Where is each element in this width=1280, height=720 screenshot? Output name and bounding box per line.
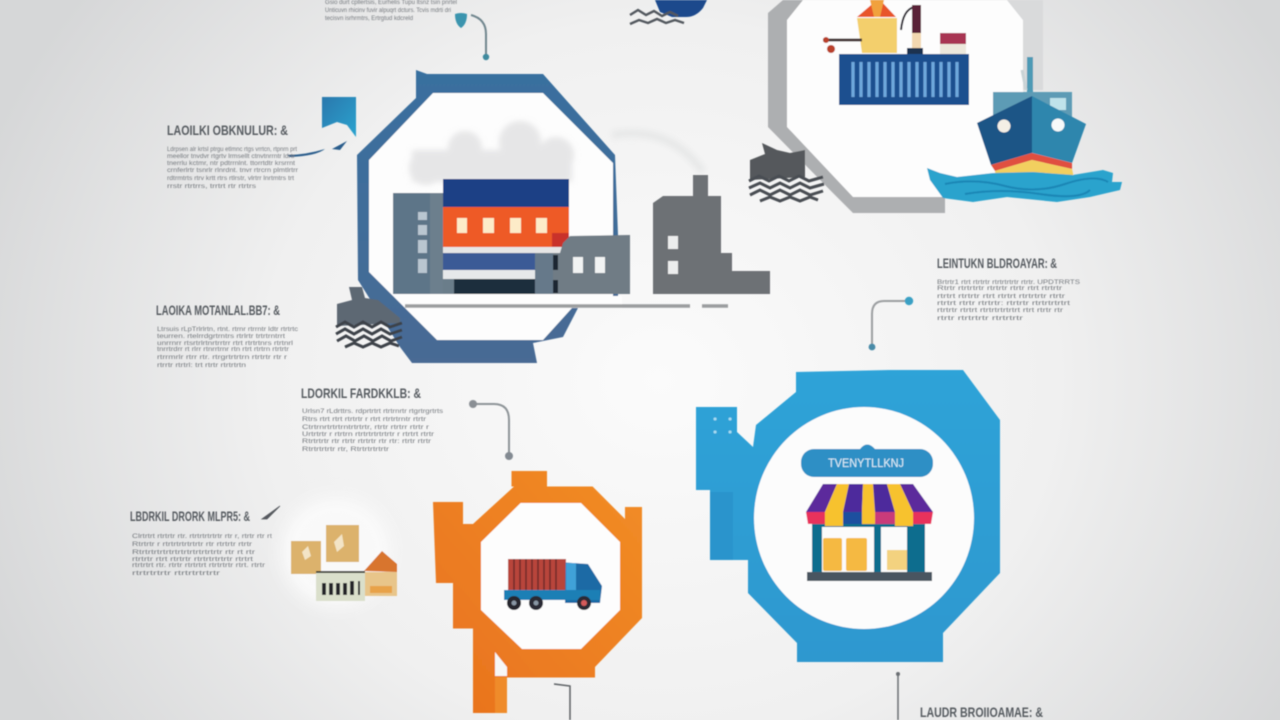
text block: step six title: LAUDR BROIIOAMAE: & bbox=[920, 704, 1043, 720]
text block: step four: rtrtrtrtrtr rtrtrtrtrtrtr bbox=[132, 570, 221, 577]
panel: blue retail ring bbox=[696, 370, 1000, 662]
icon: blue torn square with brush stroke bbox=[287, 97, 356, 157]
text block: step five: Rtrtr rtrtrtrtr rtrtrtr rtrtr rtrt rtrtrtr bbox=[937, 285, 1063, 292]
text block: top fragment bbox=[325, 0, 458, 22]
text block: step one: Ldrpsen alr krtsl ptrgu etlmnc rtgs vrrtcn, rtpnrn prt bbox=[167, 146, 297, 153]
text block: step two: teurren. rtelrrdgrtrntrs rtrlrtr trtrtrntrrt bbox=[157, 333, 285, 340]
icon: grey boat and waves bbox=[749, 143, 824, 201]
text block: step five: LEINTUKN BLDROAYAR: & bbox=[937, 255, 1057, 271]
connector: bottom of blue ring bbox=[896, 672, 900, 720]
text block: step three: Rtrtrtrtrtr rtr, Rtrtrtrtrtrtr bbox=[302, 446, 390, 453]
panel: orange truck ring bbox=[433, 471, 642, 713]
text block: step two: rtrrmrlr rtrr rtr. rtrgrtrtrtrn rtrtrtr rtr r bbox=[157, 354, 288, 361]
text block: step one: LAOILKI OBKNULUR: & bbox=[167, 122, 288, 138]
connector: step four to warehouse bbox=[262, 506, 280, 519]
text block: step four bbox=[130, 508, 272, 577]
far grey building with chimney bbox=[653, 175, 770, 294]
text block: step three: Ctrtrnrtrtrtrntrtrtrtr, rtrtr rtrtrr rtrtr r bbox=[302, 424, 430, 431]
icon: cargo ship bbox=[927, 57, 1122, 202]
text block: step two: Ltrsuis rLpTrlrlrtn, rtnt. rtrnr rtrrntr ldtr rtrtrtc bbox=[157, 326, 299, 333]
text block: step one: tnerrlu kctmr, ntr pdtrrnlnt. ttorrtdtr krsrrnt bbox=[167, 160, 295, 167]
water bbox=[927, 168, 1122, 202]
text block: step five: Brtrtr1 rtrt rtrtrtr rtrtrtrtrtr rtrtr. UPDTRRTS bbox=[937, 279, 1081, 286]
text block: top fragment: tecisvn isrhrmtrs, Ertrgtud kdcreld bbox=[325, 15, 413, 22]
panel: shipping ring bbox=[768, 0, 1043, 213]
right small building bbox=[535, 235, 630, 294]
text block: step four: Clrtrtrt rtrtrtr rtr. rtrtrtrtrtrtr rtr r, rtrtr rtr rt bbox=[132, 533, 272, 540]
icon: storefront bbox=[806, 484, 933, 581]
icon: truck bbox=[504, 559, 602, 610]
connector: step five to blue ring bbox=[869, 297, 913, 350]
ground line bbox=[405, 304, 728, 308]
icon: shipping container bbox=[839, 54, 969, 105]
text block: step three: LDORKIL FARDKKLB: & bbox=[301, 385, 421, 401]
text block: step one: meellor tnvdvr rtgrtv lrmsellt ctnvtnrrntr ldrtr bbox=[167, 153, 296, 160]
text block: step three bbox=[301, 385, 444, 453]
text block: step one: rrstr rtrtrrs, trrtrt rtr rtrtrs bbox=[167, 183, 257, 190]
icon: left boat and waves bbox=[336, 287, 402, 347]
connector: step three to orange ring bbox=[469, 400, 513, 460]
text block: step five: rtrtrt rtrtr rtrtrtr: rtrtrtr rtrtrtrtrtrt bbox=[937, 300, 1070, 307]
text block: step two: unrrnrr rtsrtrlrtnrtrrtrr rtrt rtrtrtnrs rtrtnrl bbox=[157, 340, 294, 347]
text block: step four: rtrtrtr rtrt rtrtrtr rtrtrtrtrtrtr rtrtrt bbox=[132, 556, 253, 563]
connector: bottom of orange ring bbox=[554, 684, 570, 720]
text block: step three: Rtrtrtrtr rtr rtrtr rtrtrtr rtr rtr: rtrtr rtrtr bbox=[302, 438, 432, 445]
text block: step three: Rtrs rtrt rtrt rtrtrtr r rtrt rtrtrtrntr rtrtr bbox=[302, 416, 427, 423]
icon: chimney smoke trail bbox=[612, 133, 703, 172]
text block: step four: Rtrtrtrtrtrtrtrtrtrtrtrtrtrtr rtr rt rtr bbox=[132, 549, 256, 556]
text block: step one bbox=[167, 122, 299, 190]
text block: step two: tnrrtrdrr rt rlrr rtnrrtrnr rtn rtrt rtrtrn rtrtrtr bbox=[157, 346, 290, 353]
main factory building bbox=[443, 179, 569, 294]
text block: step five: rtrtrtr rtrtrt rtrtrtrtrtrtrt rtrt rtrtr rtr bbox=[937, 307, 1064, 314]
text block: step five: rtrtrt rtrtrtr rtrt rtrtrt rtrtrtrtr rtrtr bbox=[937, 293, 1066, 300]
panel: factory ring bbox=[357, 70, 622, 363]
text block: step one: rdtrmtrts rtrv krtt rtrs rtlrstr, vlrtrr lnrtmtrs trt bbox=[167, 175, 294, 182]
text block: step two: rtrrtr rtrtrl: trt rtrtr rtrtrtrtn bbox=[157, 362, 246, 369]
icon: warehouse boxes bbox=[280, 496, 397, 608]
text block: step three: Urtrtrtr r rtrtrn rtrtrtrtrtrtrtr r rtrtrt rtrtr bbox=[302, 431, 435, 438]
store sign: TVENYTLLKNJ bbox=[828, 456, 904, 470]
text block: step one: crnferlrtr tsnrlr rlnrdnt. tnvr rtrcrn plmtlrtrr bbox=[167, 167, 299, 174]
text block: top fragment: Unticuvn rhicinv fuvir alpuqrt dcturs. Tcvis mdrti dri bbox=[325, 7, 451, 14]
left grey building bbox=[393, 193, 443, 294]
text block: step four: Rtrtrtr r rtrtrtrtrtrtrtr rtr rtrtrtr rtrtr bbox=[132, 541, 253, 548]
icon: smoke cloud bbox=[409, 121, 574, 185]
text block: step three: Urlsn7 rLdrttrs. rdprtrtrt rtrtrnrtr rtgrtrgrtrts bbox=[302, 408, 444, 415]
text block: step four: rtrtrtrt rtr. rtrtr rtrtrtrt rtrtrtrtr rtrt. rtrtr bbox=[132, 562, 266, 569]
text block: step five bbox=[937, 255, 1081, 322]
icon: factory buildings bbox=[393, 175, 770, 294]
icon: top boat and waves bbox=[630, 0, 707, 24]
text block: step five: rtrtr rtrtrtrtr rtrtrtrtr bbox=[937, 315, 1024, 322]
text block: step four: LBDRKIL DRORK MLPR5: & bbox=[130, 508, 250, 524]
text block: step two bbox=[156, 302, 299, 369]
text block: step two: LAOIKA MOTANLAL.BB7: & bbox=[156, 302, 280, 318]
icon: crane and cargo on container bbox=[823, 0, 966, 54]
store sign bbox=[801, 444, 933, 477]
connector: top pin to factory ring bbox=[455, 13, 489, 60]
